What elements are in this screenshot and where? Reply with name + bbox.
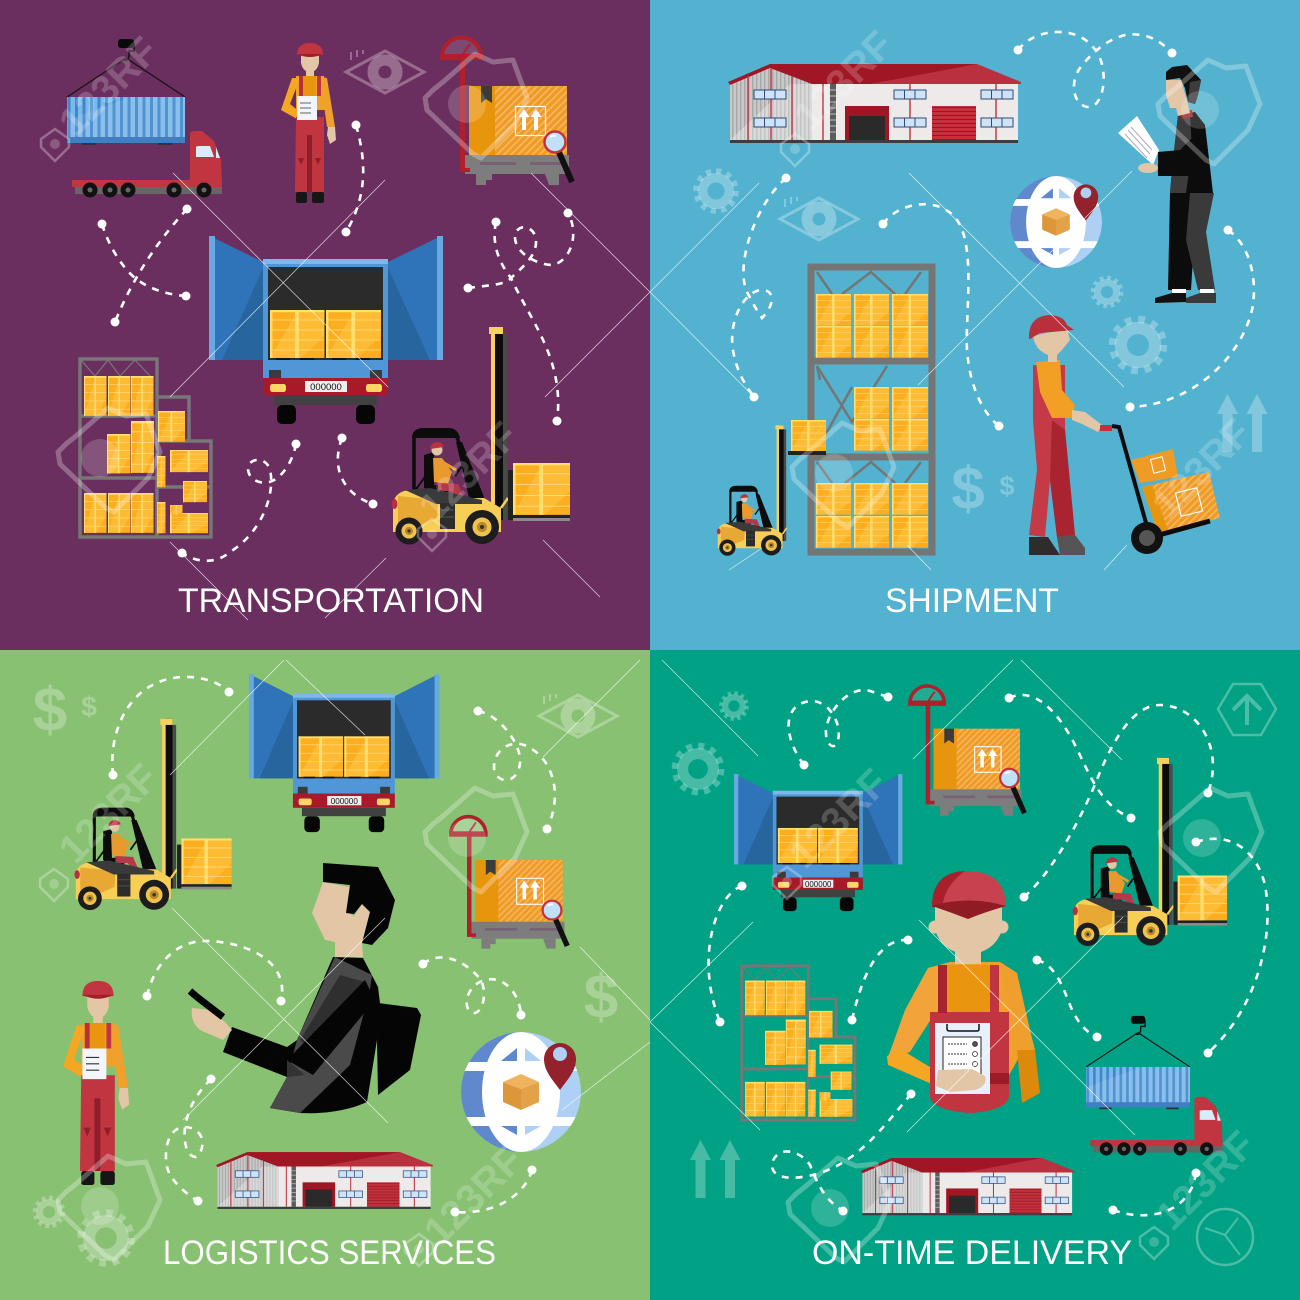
panel: transportation <box>0 0 650 650</box>
background icons: gears, eye, dollars, arrows: $ <box>951 455 985 522</box>
worker with clipboard <box>63 981 129 1185</box>
worker with clipboard <box>281 43 336 203</box>
background icons: gears, eye, dollars, arrows <box>696 171 1268 522</box>
container truck with crane hook <box>67 39 222 198</box>
background icons: dollars, eye, gears: $ <box>584 963 618 1032</box>
forklift lifting crate <box>717 420 826 556</box>
forklift with pallet <box>1073 758 1227 946</box>
warehouse building <box>728 64 1021 143</box>
title: on-time delivery: ON-TIME DELIVERY <box>812 1234 1132 1272</box>
delivery truck with open doors <box>249 674 440 832</box>
stock watermark overlay: 123RF <box>51 756 167 872</box>
title: transportation: TRANSPORTATION <box>178 582 484 620</box>
background icons: gears, eye, dollars, arrows: $ <box>999 471 1015 501</box>
weighing scale with box <box>440 38 572 185</box>
forklift with pallet <box>75 719 232 910</box>
stock watermark overlay: 123RF <box>781 761 897 877</box>
warehouse building <box>861 1158 1074 1215</box>
dashed routes <box>732 32 1254 431</box>
worker pushing hand truck <box>1029 315 1220 555</box>
background icons: dollars, eye, gears: $ <box>81 691 97 722</box>
background icons: dollars, eye, gears <box>33 676 618 1263</box>
forklift with pallet <box>392 327 570 544</box>
stock watermark overlay: 123RF <box>1148 1123 1264 1239</box>
stock watermark overlay: 123RF <box>411 414 527 530</box>
icon: eye <box>346 50 424 93</box>
globe with parcel and location pin <box>461 1032 581 1152</box>
delivery truck with open doors <box>734 774 902 911</box>
dashed routes <box>108 677 555 1216</box>
stock watermark overlay: 123RF <box>51 29 167 145</box>
manager with phone <box>190 863 421 1113</box>
stock watermark overlay: 123RF <box>416 1138 532 1254</box>
globe with parcel and location pin <box>1010 176 1102 268</box>
delivery truck with open doors: 000000 <box>331 797 358 806</box>
panel: logistics services <box>0 650 650 1300</box>
title: logistics services: LOGISTICS SERVICES <box>163 1234 496 1272</box>
warehouse rack with crates <box>80 359 211 537</box>
weighing scale with box <box>449 817 567 949</box>
warehouse building <box>216 1152 433 1209</box>
warehouse rack with crates <box>742 966 855 1120</box>
delivery truck with open doors: 000000 <box>805 880 832 889</box>
container truck with crane hook <box>1086 1016 1223 1155</box>
stock watermark overlay: 123RF <box>1144 411 1260 527</box>
dashed routes <box>98 120 573 561</box>
large worker with checklist <box>887 871 1040 1113</box>
delivery truck with open doors <box>209 236 443 424</box>
background icons: dollars, eye, gears: $ <box>33 676 67 745</box>
weighing scale with box <box>908 686 1024 816</box>
delivery truck with open doors: 000000 <box>310 382 342 393</box>
tall rack with crates <box>811 267 932 552</box>
stock watermark overlay: 123RF <box>786 23 902 139</box>
manager reading document <box>1118 65 1216 303</box>
title: shipment: SHIPMENT <box>885 582 1059 620</box>
panel: on-time delivery <box>650 650 1300 1300</box>
dashed routes <box>709 690 1268 1216</box>
panel: shipment <box>650 0 1300 650</box>
background icons: gears, up arrow hexagon, arrows, clock <box>675 684 1276 1265</box>
